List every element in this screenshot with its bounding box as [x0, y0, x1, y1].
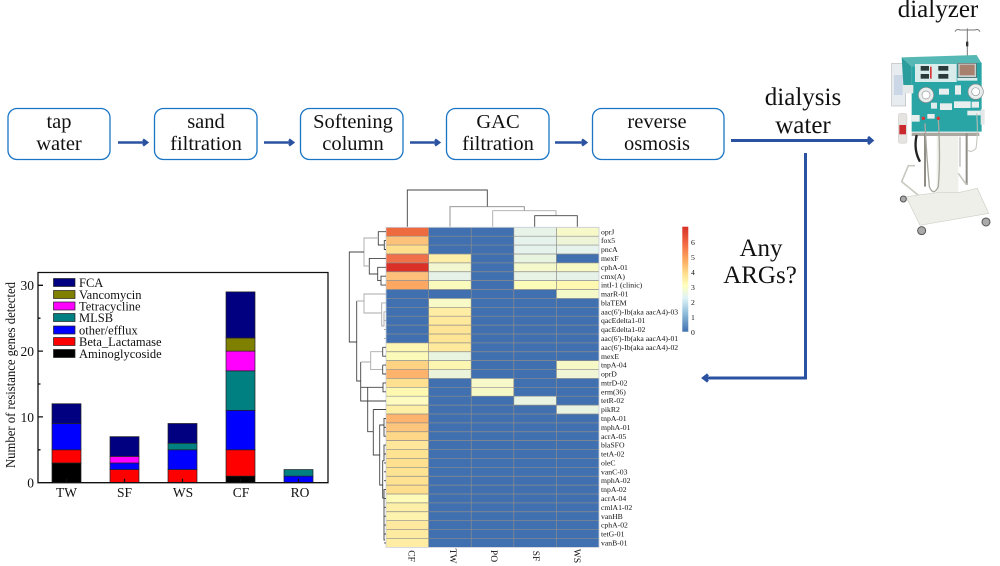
x axis labels: RO — [291, 485, 310, 500]
label: dialysis water — [765, 84, 841, 139]
y axis tick labels — [20, 278, 34, 490]
legend: Vancomycin — [79, 288, 142, 302]
legend: FCA — [79, 276, 103, 290]
row labels: oprJ — [601, 227, 614, 236]
column labels: TW — [447, 549, 457, 563]
row labels: marR-01 — [601, 290, 628, 299]
legend: other/efflux — [79, 324, 139, 338]
row labels: blaSFO — [601, 441, 625, 450]
y axis tick labels: 20 — [20, 344, 34, 359]
colour scale legend: 6 — [691, 238, 695, 247]
row labels: aac(6')-Ib(aka aacA4)-01 — [601, 334, 678, 343]
row labels: tetG-01 — [601, 530, 625, 539]
colour scale legend: 0 — [691, 328, 695, 337]
process step: tap water — [8, 108, 110, 160]
row labels: intI-1 (clinic) — [601, 281, 643, 290]
process step: GAC filtration — [446, 108, 549, 160]
chart frame and ticks — [38, 272, 328, 483]
arrow: reverse osmosis to dialyzer — [731, 137, 872, 144]
legend: MLSB — [79, 311, 113, 325]
label: dialysis water: dialysis — [765, 84, 841, 111]
legend: Tetracycline — [79, 300, 141, 314]
row labels: tnpA-01 — [601, 414, 627, 423]
x axis labels: TW — [56, 485, 77, 500]
arrow: tap water to sand filtration — [118, 140, 147, 146]
colour scale legend: 2 — [691, 298, 695, 307]
colour scale legend: 5 — [691, 253, 695, 262]
process step: reverse osmosis: reverse — [627, 111, 687, 133]
legend: Beta_Lactamase — [79, 335, 162, 349]
row dendrogram — [349, 232, 386, 543]
arrow: GAC filtration to reverse osmosis — [555, 140, 586, 146]
row labels: qacEdelta1-02 — [601, 325, 646, 334]
colour scale legend: 3 — [691, 283, 695, 292]
process step: sand filtration: filtration — [170, 133, 242, 155]
row labels: mphA-02 — [601, 476, 631, 485]
row labels: mtrD-02 — [601, 378, 628, 387]
row labels: oprD — [601, 370, 617, 378]
x axis labels — [56, 485, 310, 500]
row labels: vanC-03 — [601, 467, 628, 476]
row labels: cmlA1-02 — [601, 503, 632, 512]
process step: tap water: tap — [46, 111, 72, 133]
question: Any ARGs?: Any — [739, 235, 783, 262]
heatmap cells — [386, 227, 599, 547]
bar: WS — [168, 423, 197, 483]
x axis labels: WS — [173, 485, 193, 500]
process step: sand filtration — [154, 108, 257, 160]
row labels: vanB-01 — [601, 538, 628, 548]
colour scale legend — [682, 227, 695, 337]
row labels: tnpA-04 — [601, 361, 627, 370]
x axis labels: CF — [233, 485, 250, 500]
row labels: cmx(A) — [601, 272, 625, 281]
row labels: cphA-01 — [601, 263, 628, 272]
question: Any ARGs? — [723, 235, 797, 289]
icon: dialysis machine — [892, 28, 990, 235]
question: Any ARGs?: ARGs? — [723, 262, 797, 289]
process step: softening column: Softening — [313, 111, 393, 133]
row labels: mphA-01 — [601, 423, 631, 432]
process step: GAC filtration: GAC — [476, 111, 520, 133]
y axis tick labels: 30 — [20, 278, 34, 293]
y axis tick labels: 10 — [20, 410, 34, 425]
bar: RO — [284, 470, 313, 483]
bar: CF — [226, 292, 255, 483]
row labels: cphA-02 — [601, 521, 628, 530]
arrow: sand filtration to softening column — [264, 140, 293, 146]
row labels: aac(6')-Ib(aka aacA4)-03 — [601, 307, 678, 316]
row labels: erm(36) — [601, 387, 626, 396]
bar: SF — [110, 437, 139, 483]
row labels: pikR2 — [601, 405, 620, 414]
arrow: softening column to GAC filtration — [410, 140, 439, 146]
row labels: mexE — [601, 352, 619, 361]
column labels: SF — [530, 551, 540, 561]
column dendrogram — [407, 190, 577, 227]
column labels: PO — [488, 550, 498, 562]
row labels: acrA-04 — [601, 494, 626, 503]
x axis labels: SF — [117, 485, 132, 500]
row labels: pncA — [601, 245, 618, 254]
process step: softening column: column — [322, 133, 384, 155]
process step: GAC filtration: filtration — [462, 133, 534, 155]
row labels: mexF — [601, 254, 619, 263]
stacked bar chart: resistance genes detected — [3, 272, 328, 500]
arrow: dialysis water to ARG analysis — [704, 153, 806, 382]
process step: sand filtration: sand — [187, 111, 225, 133]
colour scale legend: 4 — [691, 268, 695, 277]
bar: TW — [52, 404, 81, 483]
row labels: tetR-02 — [601, 396, 624, 405]
column labels: WS — [571, 549, 581, 563]
column labels: CF — [406, 550, 416, 562]
label: dialysis water: water — [775, 112, 831, 139]
colour scale legend: 1 — [691, 313, 695, 322]
process step: reverse osmosis: osmosis — [624, 133, 690, 155]
legend — [54, 276, 162, 361]
row labels: vanHB — [601, 512, 623, 521]
legend: Aminoglycoside — [79, 347, 162, 361]
row labels: fox5 — [601, 236, 615, 245]
row labels — [601, 227, 678, 548]
heatmap: ARG abundance across samples — [349, 190, 695, 563]
column labels — [406, 549, 581, 563]
row labels: qacEdelta1-01 — [601, 316, 646, 325]
row labels: tetA-02 — [601, 450, 625, 459]
row labels: aac(6')-Ib(aka aacA4)-02 — [601, 343, 678, 352]
row labels: acrA-05 — [601, 432, 626, 441]
row labels: tnpA-02 — [601, 485, 627, 494]
row labels: blaTEM — [601, 298, 627, 307]
y axis tick labels: 0 — [27, 476, 34, 490]
row labels: oleC — [601, 458, 616, 468]
process step: tap water: water — [36, 133, 82, 155]
process step: softening column — [300, 108, 403, 160]
process step: reverse osmosis — [592, 108, 724, 160]
y axis title: Number of resistance genes detected — [3, 282, 18, 468]
